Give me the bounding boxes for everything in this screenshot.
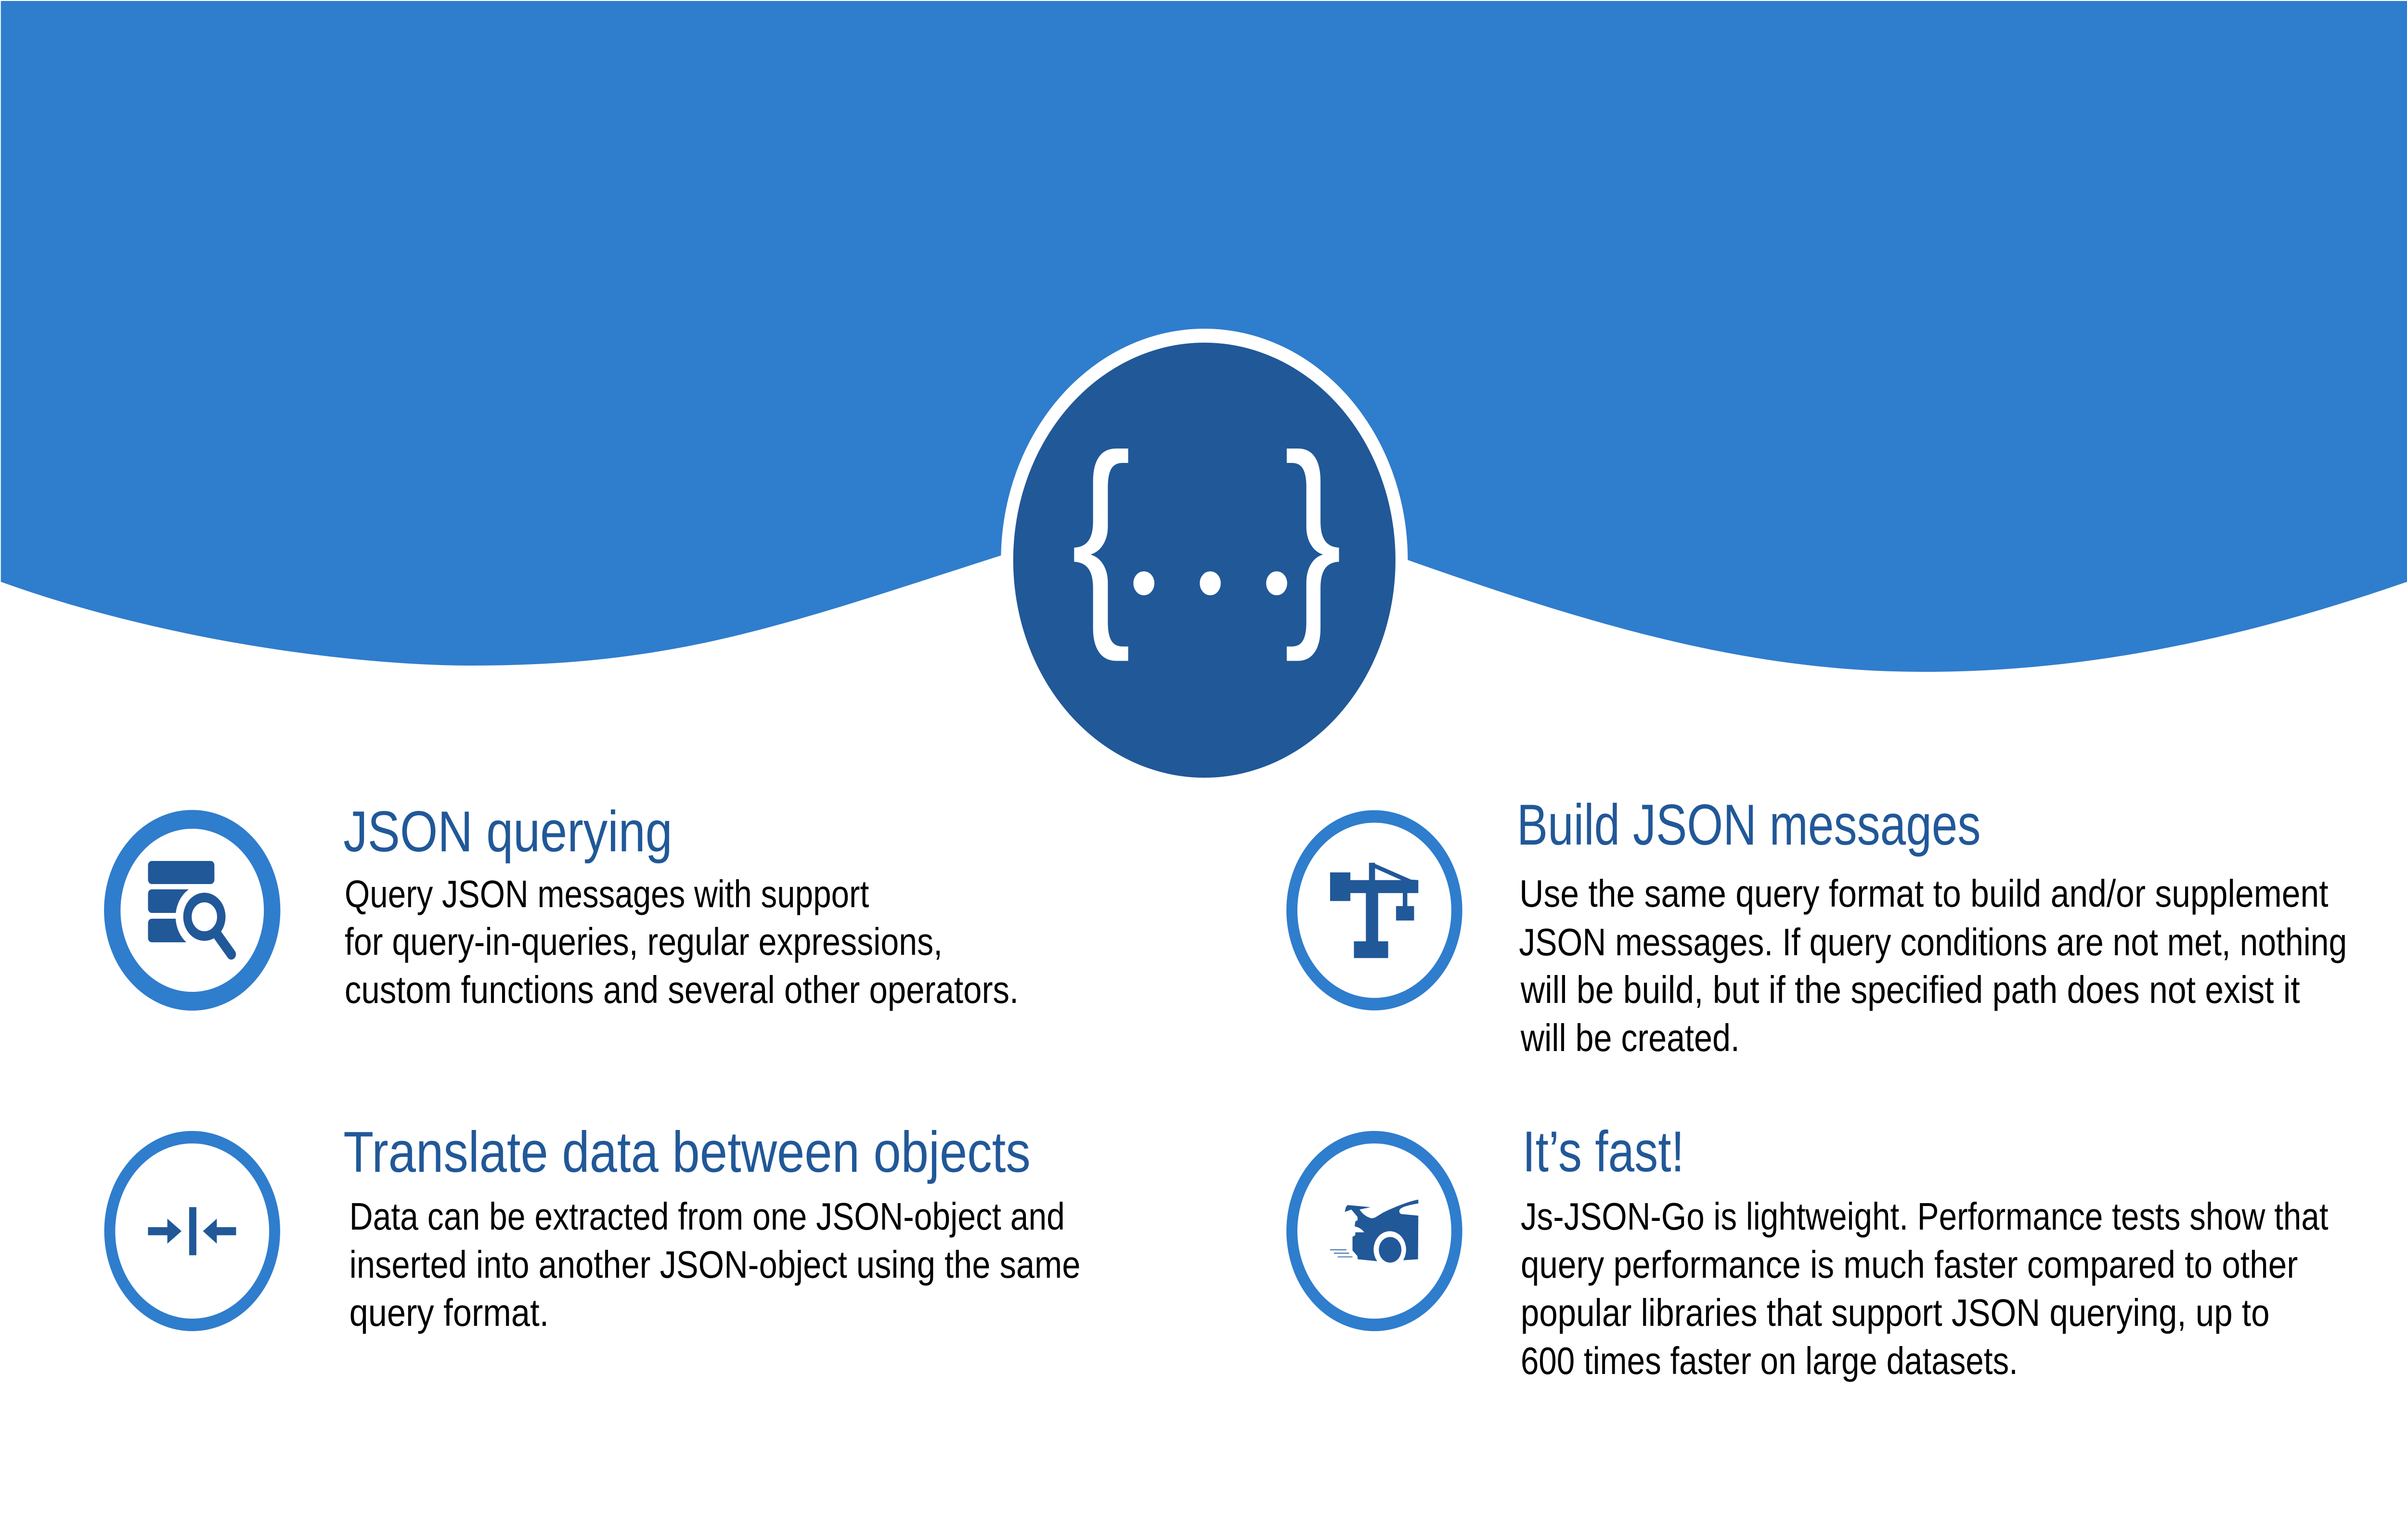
heading: JSON querying: JSON querying <box>343 799 673 864</box>
ellipsis dots: . <box>1255 412 1299 636</box>
text block: Translate data between objects: Data can be extracted from one JSON-object and <box>349 1195 1065 1238</box>
icon: database search <box>112 819 272 1001</box>
heading: It's fast!: It’s fast! <box>1522 1119 1684 1184</box>
text block: Build JSON messages: Use the same query format to build and/or supplement <box>1519 872 2329 915</box>
ellipsis dots <box>1122 412 1299 636</box>
text block: It's fast!: Js-JSON-Go is lightweight. Performance tests show that <box>1521 1195 2329 1238</box>
text block: Translate data between objects: query format. <box>349 1291 549 1334</box>
text block: It's fast!: query performance is much faster compared to other <box>1521 1243 2298 1286</box>
text block: JSON querying <box>345 873 1019 1011</box>
right brace: } <box>1284 408 1342 664</box>
text block: Build JSON messages: JSON messages. If query conditions are not met, nothing <box>1519 921 2347 963</box>
text block: Build JSON messages: will be build, but if the specified path does not exist it <box>1520 968 2300 1011</box>
icon: fast car <box>1292 1137 1457 1325</box>
text block: JSON querying: for query-in-queries, regular expressions, <box>345 920 943 963</box>
text block: It's fast!: 600 times faster on large datasets. <box>1521 1339 2018 1382</box>
icon: crane <box>1292 816 1457 1004</box>
text block: JSON querying: custom functions and several other operators. <box>345 968 1019 1011</box>
text block: Translate data between objects: inserted into another JSON-object using the same <box>349 1243 1080 1286</box>
heading: Translate data between objects: Translate data between objects <box>343 1120 1031 1184</box>
ellipsis dots: . <box>1188 412 1232 636</box>
ellipsis dots: . <box>1122 412 1166 636</box>
text block: It's fast! <box>1521 1195 2329 1382</box>
header wave banner <box>1 1 2407 672</box>
text block: Build JSON messages <box>1519 872 2347 1059</box>
text block: JSON querying: Query JSON messages with support <box>345 873 869 915</box>
central JSON badge <box>1001 329 1408 792</box>
heading: Build JSON messages: Build JSON messages <box>1517 793 1981 857</box>
text block: Translate data between objects <box>349 1195 1080 1334</box>
icon: converging arrows <box>110 1137 275 1325</box>
text block: It's fast!: popular libraries that support JSON querying, up to <box>1521 1291 2270 1334</box>
left brace: { <box>1071 408 1131 664</box>
text block: Build JSON messages: will be created. <box>1520 1016 1740 1059</box>
